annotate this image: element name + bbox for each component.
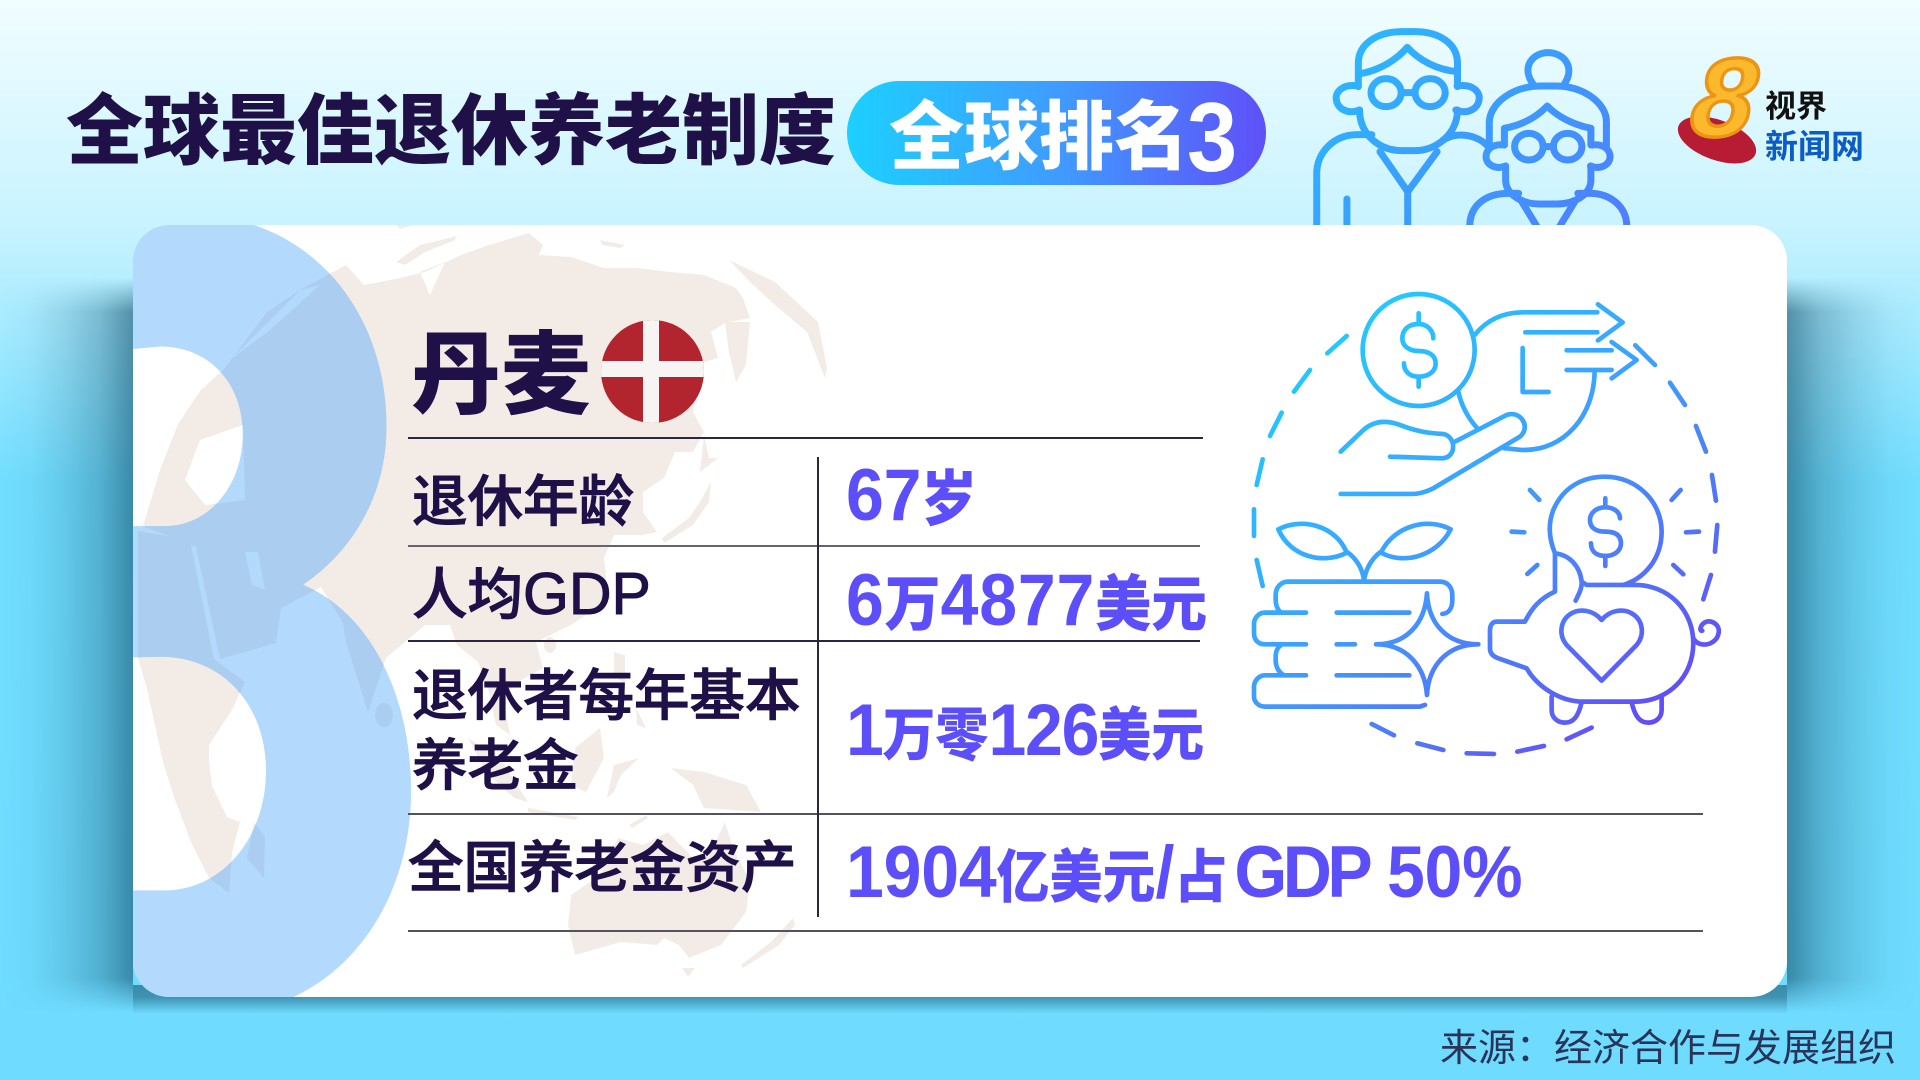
logo: [1678, 34, 1864, 165]
row label: basic pension: [412, 665, 801, 797]
ranking number: 3: [1187, 82, 1237, 192]
row label: GDP per capita: 人均GDP: [412, 561, 651, 627]
source note: 来源：经济合作与发展组织: [1440, 1028, 1896, 1070]
row value: retirement age: 67岁: [846, 454, 977, 536]
ranking text: 全球排名: [889, 95, 1189, 179]
icon: Danish flag: [601, 320, 704, 423]
row value: GDP per capita: 6万4877美元: [846, 559, 1207, 641]
world map background and big rank numeral 3: [133, 225, 827, 997]
logo text: 视界: 视界: [1765, 89, 1827, 124]
row label: pension assets: 全国养老金资产: [408, 837, 797, 899]
ranking pill: [847, 81, 1266, 185]
row value: pension assets: 1904亿美元/占GDP 50%: [846, 831, 1522, 913]
logo mark: golden 8 on red disc: 8: [1685, 34, 1765, 160]
icon: elderly couple: [1313, 28, 1630, 225]
country heading: 丹麦: [411, 326, 591, 426]
row value: basic pension: 1万零126美元: [846, 689, 1204, 771]
row label: basic pension: 养老金: [412, 735, 579, 797]
logo text: 新闻网: 新闻网: [1765, 128, 1864, 165]
row label: retirement age: 退休年龄: [412, 471, 634, 533]
panel: Denmark card: [133, 225, 1787, 997]
title: 全球最佳退休养老制度: [66, 89, 836, 175]
row label: basic pension: 退休者每年基本: [412, 665, 801, 727]
